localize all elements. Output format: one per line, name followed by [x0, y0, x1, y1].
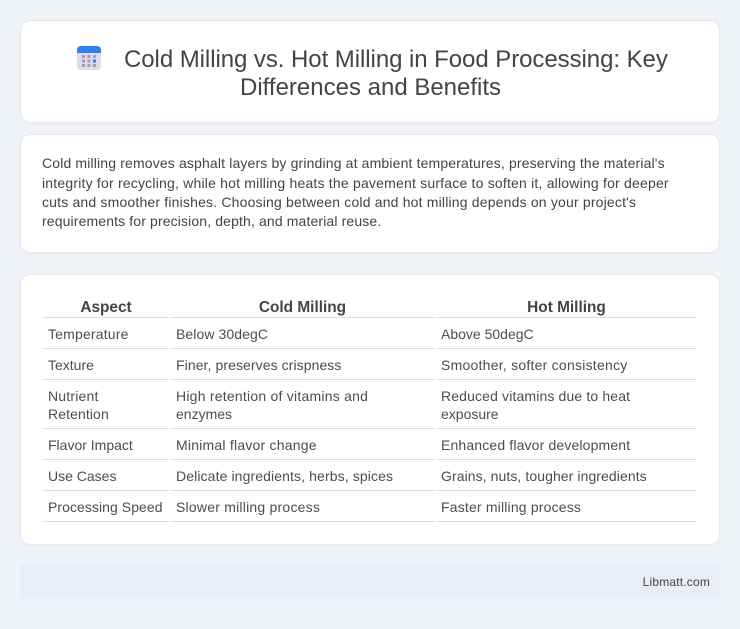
row: nutrient retention: Reduced vitamins due to heat — [441, 388, 630, 404]
panel: intro text card — [20, 134, 720, 253]
row: nutrient retention: exposure — [441, 406, 499, 422]
title: Cold Milling vs. Hot Milling in Food Processing: Key — [124, 46, 668, 73]
row: processing speed: Faster milling process — [441, 499, 581, 515]
row: temperature: Temperature — [48, 326, 129, 342]
title second line: Differences and Benefits — [240, 74, 501, 101]
text block: intro — [42, 155, 669, 229]
footer bar — [20, 565, 720, 599]
icon: calendar — [77, 46, 101, 70]
row: nutrient retention — [48, 388, 630, 422]
row: nutrient retention: Nutrient — [48, 388, 99, 404]
row: use cases — [48, 468, 647, 484]
row: texture — [48, 357, 628, 373]
row: nutrient retention: High retention of vitamins and — [176, 388, 368, 404]
row: texture: Finer, preserves crispness — [176, 357, 341, 373]
row: flavor impact — [48, 437, 630, 453]
row: processing speed: Slower milling process — [176, 499, 320, 515]
row: texture: Smoother, softer consistency — [441, 357, 627, 373]
row: temperature — [48, 326, 534, 342]
row: texture: Texture — [48, 357, 94, 373]
row: use cases: Grains, nuts, tougher ingredients — [441, 468, 647, 484]
table headers: Hot Milling — [527, 299, 606, 316]
text block: intro: requirements for precision, depth, and material reuse. — [42, 213, 381, 229]
row: use cases: Use Cases — [48, 468, 116, 484]
text block: intro: integrity for recycling, while hot milling heats the pavement surface to soften it, allowing for deeper — [42, 175, 669, 191]
panel: title card — [20, 20, 720, 123]
table headers: Cold Milling — [259, 299, 346, 316]
row: processing speed: Processing Speed — [48, 499, 163, 515]
text block: intro: Cold milling removes asphalt layers by grinding at ambient temperatures, preserving the material's — [42, 155, 665, 171]
row: flavor impact: Enhanced flavor development — [441, 437, 630, 453]
text block: intro: cuts and smoother finishes. Choosing between cold and hot milling depends on your project's — [42, 194, 636, 210]
table: comparison — [43, 299, 697, 522]
row: use cases: Delicate ingredients, herbs, spices — [176, 468, 393, 484]
row: temperature: Above 50degC — [441, 326, 534, 342]
row: nutrient retention: Retention — [48, 406, 109, 422]
footer text: Libmatt.com — [643, 575, 710, 589]
row: temperature: Below 30degC — [176, 326, 268, 342]
table headers — [80, 299, 606, 316]
row: nutrient retention: enzymes — [176, 406, 232, 422]
row: flavor impact: Flavor Impact — [48, 437, 133, 453]
row: flavor impact: Minimal flavor change — [176, 437, 317, 453]
panel: comparison table card — [20, 274, 720, 545]
row: processing speed — [48, 499, 581, 515]
table headers: Aspect — [80, 299, 132, 316]
